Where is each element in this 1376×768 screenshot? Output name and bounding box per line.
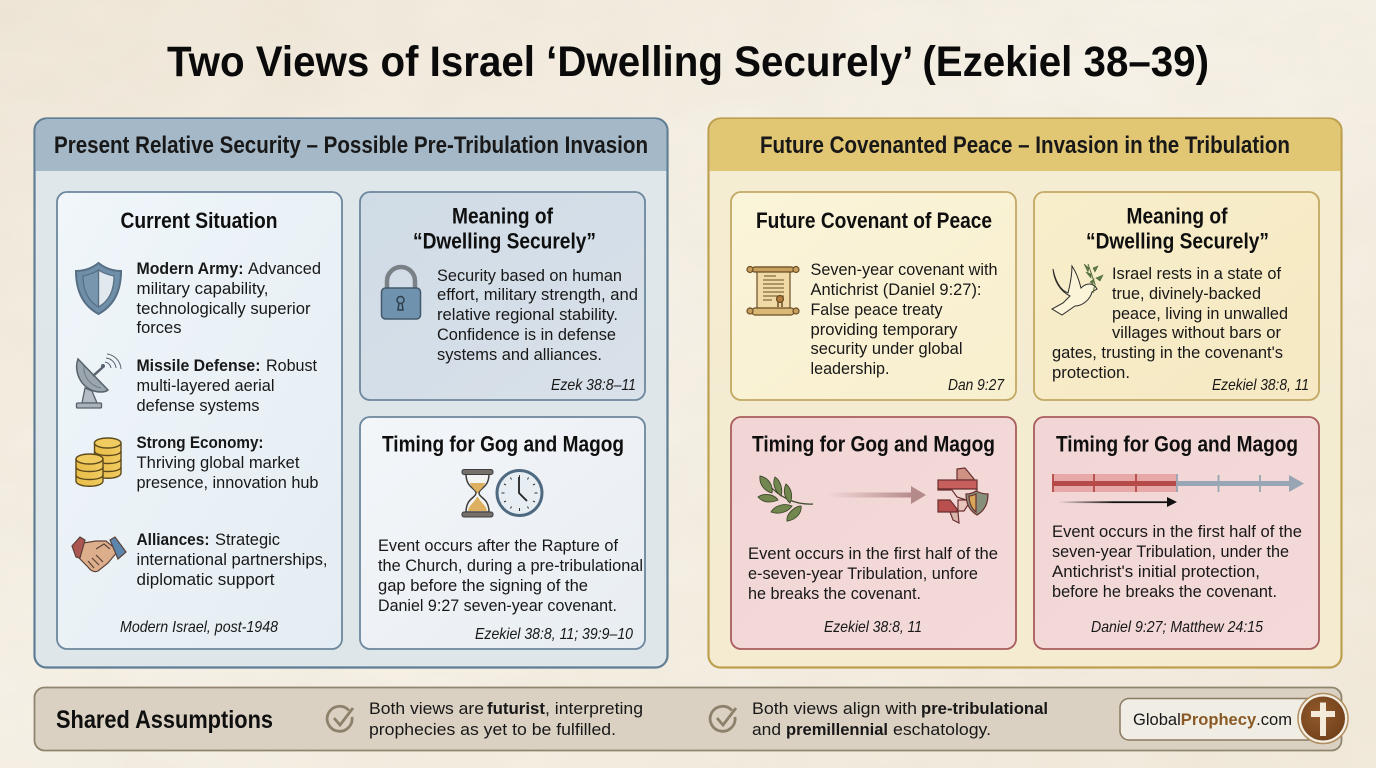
text: futurist: prophecies as yet to be fulfilled. [369,720,616,739]
text: divinely-backed peace: Israel rests in a state of [1112,264,1281,283]
text: alliances: international partnerships, [136,550,328,569]
text: pre-tribulational [752,699,1048,739]
text: first half of tribulation: he breaks the covenant. [748,584,921,603]
text: divinely-backed peace: true, divinely-backed [1112,284,1261,303]
text: strong economy: Strong Economy: [136,433,264,452]
text: seven-year covenant: False peace treaty [810,300,943,319]
text: seven-year covenant: security under global [810,339,962,358]
text: human security: relative regional stability. [437,305,618,324]
text: modern army: technologically superior [136,299,311,318]
text: futurist: futurist [487,699,545,718]
text: missile defense [136,356,317,415]
heading: meaning of dwelling securely: Meaning of [1126,204,1228,228]
text: pre-tribulational: Both views align with [752,699,917,718]
text: human security: effort, military strength, and [437,285,638,304]
card: meaning of dwelling securely (future) [1034,192,1319,400]
icon: scroll [747,266,799,315]
text: timing after rapture: the Church, during a pre-tribulational [378,556,643,575]
text: pre-tribulational: pre-tribulational [921,699,1048,718]
reference: ezekiel 38:8, 11: Ezekiel 38:8, 11 [1212,377,1309,394]
icon: check 2 [710,706,736,731]
text: missile defense: Robust [266,356,317,375]
reference: dan 9:27: Dan 9:27 [948,377,1005,394]
text: futurist: Both views are [369,699,484,718]
text: first half of tribulation: e-seven-year Tribulation, unfore [748,564,978,583]
text: human security: systems and alliances. [437,345,602,364]
text: timing after rapture: Event occurs after the Rapture of [378,536,618,555]
card: meaning of dwelling securely (present) [360,192,645,400]
text: seven-year covenant: Seven-year covenant with [810,260,998,279]
heading: timing for gog and magog: Timing for Gog and Magog [382,432,624,456]
panel: future covenanted peace [708,118,1342,668]
reference: modern israel: Modern Israel, post-1948 [120,619,278,636]
icon: broken covenant map with shield [938,468,988,523]
heading: meaning of dwelling securely: Meaning of [452,204,554,228]
card: timing (antichrist protection) [1034,417,1319,649]
reference: ezekiel 38:8, 11; 39:9-10: Ezekiel 38:8, 11; 39:9–10 [475,626,633,643]
text: modern army: Advanced [248,259,321,278]
heading: timing for gog and magog: Timing for Gog and Magog [1056,432,1298,456]
band: shared assumptions [34,688,1348,750]
text: first half of tribulation: Event occurs in the first half of the [748,544,998,563]
text: pre-tribulational: premillennial [786,720,888,739]
text: human security: Confidence is in defense [437,325,616,344]
panel header: future covenanted peace: Future Covenanted Peace – Invasion in the Tribulation [760,132,1290,159]
icon: olive branch [758,476,813,521]
text: alliances: Alliances: [136,530,210,549]
icon: dove with branch [1052,264,1103,315]
text: divinely-backed peace: protection. [1052,363,1130,382]
icon: padlock [382,267,420,319]
card: future covenant of peace [731,192,1016,400]
card: timing (covenant broken) [731,417,1016,649]
text: antichrist's initial protection: Antichrist's initial protection, [1052,562,1260,581]
text: missile defense: multi-layered aerial [136,376,274,395]
text: alliances: diplomatic support [136,570,275,589]
panel header: present relative security [36,119,667,171]
text: modern army [136,259,321,337]
text: strong economy: Thriving global market [136,453,300,472]
text: antichrist's initial protection [1052,522,1302,601]
title: Two Views of Israel ‘Dwelling Securely’ (Ezekiel 38–39) [167,38,1209,86]
text: antichrist's initial protection: seven-year Tribulation, under the [1052,542,1289,561]
text: antichrist's initial protection: before he breaks the covenant. [1052,582,1277,601]
text: strong economy [136,433,318,492]
text: seven-year covenant: Antichrist (Daniel 9:27): [810,280,982,299]
heading: meaning of dwelling securely [1086,204,1269,254]
text: divinely-backed peace [1052,264,1288,382]
text: pre-tribulational: and [752,720,781,739]
text: human security [437,266,638,364]
text: futurist [369,699,643,739]
text: seven-year covenant: providing temporary [810,320,958,339]
text: human security: Security based on human [437,266,622,285]
icon: handshake [72,537,126,572]
panel header: future covenanted peace [710,119,1340,171]
text: divinely-backed peace: villages without bars or [1112,323,1281,342]
heading: meaning of dwelling securely: “Dwelling Securely” [1086,228,1269,254]
heading: future covenant of peace: Future Covenant of Peace [756,208,992,233]
heading: shared assumptions: Shared Assumptions [56,706,273,734]
text: alliances [136,530,328,589]
text: antichrist's initial protection: Event occurs in the first half of the [1052,522,1302,541]
logo: globalprophecy.com: GlobalProphecy.com [1133,710,1292,729]
text: timing after rapture: Daniel 9:27 seven-year covenant. [378,596,617,615]
chart: tribulation timeline [1052,474,1304,507]
text: divinely-backed peace: gates, trusting in the covenant's [1052,343,1283,362]
text: first half of tribulation [748,544,998,603]
panel: present relative security [34,118,668,668]
text: missile defense: defense systems [136,396,260,415]
text: futurist: , interpreting [545,699,643,718]
icon: check 1 [327,706,353,731]
text: modern army: military capability, [136,279,268,298]
reference: ezekiel 38:8, 11: Ezekiel 38:8, 11 [824,619,922,636]
reference: daniel 9:27; matthew 24:15: Daniel 9:27; Matthew 24:15 [1091,619,1263,636]
heading: timing for gog and magog: Timing for Gog and Magog [752,432,995,456]
text: strong economy: presence, innovation hub [136,473,318,492]
heading: current situation: Current Situation [120,208,278,233]
icon: shield [76,263,121,314]
text: seven-year covenant: leadership. [810,359,890,378]
text: divinely-backed peace: peace, living in unwalled [1112,304,1288,323]
text: modern army: forces [136,318,182,337]
reference: ezek 38:8-11: Ezek 38:8–11 [551,377,636,394]
text: timing after rapture: gap before the signing of the [378,576,588,595]
icon: satellite dish [76,354,121,408]
heading: meaning of dwelling securely: “Dwelling Securely” [413,228,596,254]
text: modern army: Modern Army: [136,259,244,278]
text: timing after rapture [378,536,643,615]
icon: clock [497,470,542,516]
panel header: present relative security: Present Relative Security – Possible Pre-Tribulation Invasion [54,132,648,159]
text: pre-tribulational: eschatology. [893,720,991,739]
text: seven-year covenant [810,260,998,378]
heading: meaning of dwelling securely [413,204,596,254]
icon: hourglass [462,470,493,517]
arrow: peace to broken covenant [828,486,926,504]
icon: coin stacks [76,438,121,486]
text: alliances: Strategic [215,530,280,549]
logo: globalprophecy.com [1120,694,1348,744]
card: current situation [57,192,342,649]
text: missile defense: Missile Defense: [136,356,260,375]
card: timing (present) [360,417,645,649]
